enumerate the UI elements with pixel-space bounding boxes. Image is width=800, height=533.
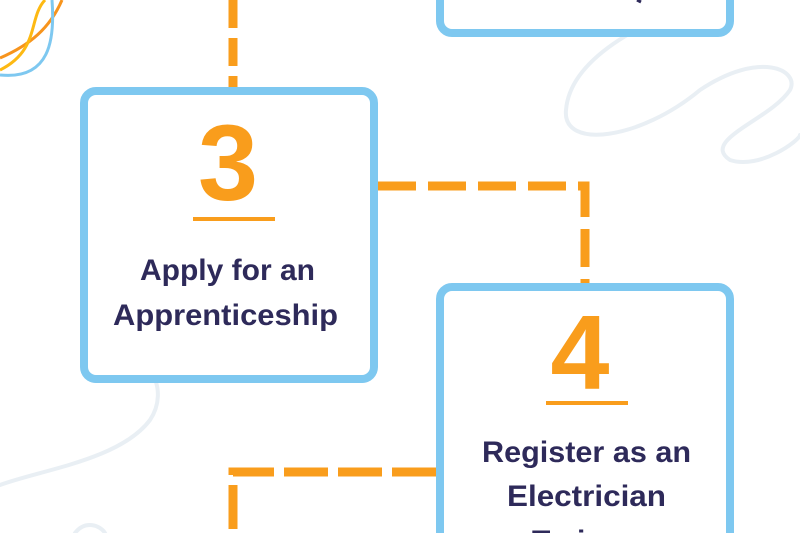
step number 4: 4 [551,294,610,412]
step 3 label [113,254,338,332]
connector: top to step 3 [228,0,238,87]
step 4 label: Register as an [482,436,691,469]
panel: step 3 [84,91,374,379]
underline [546,401,628,405]
panel: step 2 (top, cut off) [440,0,730,33]
step 3 label: Apply for an [140,254,315,287]
panel: step 4 [440,287,730,533]
step 4 label: Electrician [507,480,666,513]
decorative colored lines top-left [0,0,62,75]
connector: step 4 to step 5 [233,472,436,533]
step 4 label [482,436,691,533]
step 3 label: Apprenticeship [113,299,338,332]
connector: step 3 to step 4 [378,186,585,283]
step number 3: 3 [198,102,258,223]
underline [193,217,275,221]
